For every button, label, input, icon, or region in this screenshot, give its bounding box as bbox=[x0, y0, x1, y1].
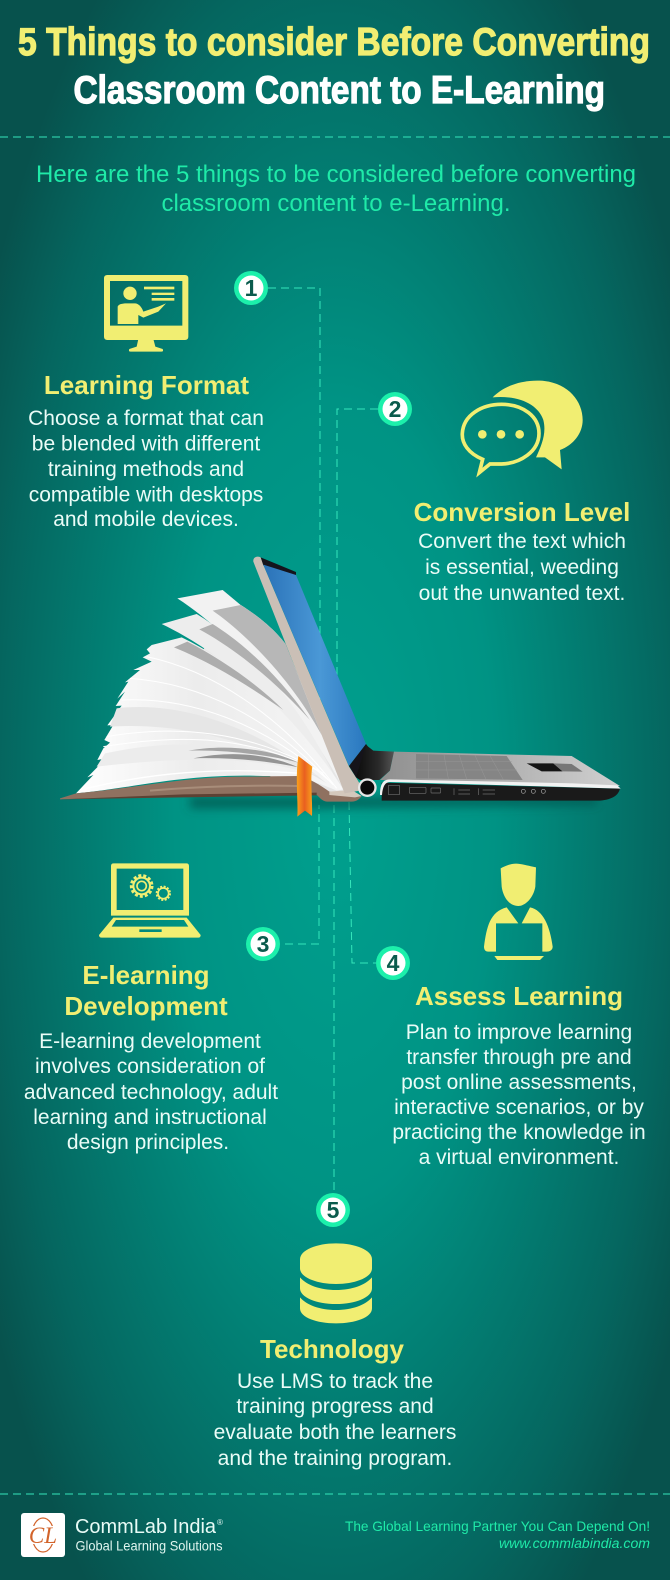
title bbox=[18, 21, 650, 112]
description: learning and instructional bbox=[33, 1106, 267, 1129]
description: design principles. bbox=[67, 1131, 229, 1154]
description bbox=[392, 1021, 646, 1169]
description: and the training program. bbox=[218, 1447, 452, 1470]
icon: database bbox=[300, 1243, 372, 1323]
badge 1 bbox=[234, 271, 268, 305]
description bbox=[28, 407, 264, 531]
description: be blended with different bbox=[32, 432, 260, 456]
heading: Learning Format bbox=[44, 370, 249, 400]
title: Classroom Content to E-Learning bbox=[74, 69, 605, 112]
connector lines bbox=[246, 288, 378, 1193]
book cover bbox=[60, 776, 362, 802]
description bbox=[418, 530, 626, 605]
description: evaluate both the learners bbox=[214, 1421, 456, 1444]
company name bbox=[75, 1516, 223, 1554]
description: Convert the text which bbox=[418, 530, 626, 553]
description: practicing the knowledge in bbox=[392, 1121, 646, 1144]
icon: laptop with gears bbox=[99, 863, 201, 938]
description: transfer through pre and bbox=[406, 1046, 632, 1069]
ports bbox=[389, 785, 545, 795]
section 4: assess learning bbox=[376, 864, 646, 1169]
intro text bbox=[36, 161, 636, 217]
description: training methods and bbox=[48, 458, 244, 481]
heading: Development bbox=[64, 991, 228, 1021]
description: Use LMS to track the bbox=[237, 1370, 433, 1393]
logo: CL bbox=[29, 1523, 57, 1548]
description: training progress and bbox=[236, 1395, 434, 1418]
icon: presenter monitor bbox=[104, 275, 188, 352]
flying pages bbox=[162, 590, 347, 792]
badge 3 bbox=[246, 927, 280, 961]
badge 2 bbox=[378, 392, 412, 426]
heading: E-learning bbox=[82, 960, 210, 990]
section 5: technology bbox=[214, 1193, 456, 1470]
badge 1: 1 bbox=[245, 275, 258, 301]
description: advanced technology, adult bbox=[24, 1081, 278, 1104]
badge 4 bbox=[376, 946, 410, 980]
intro text: classroom content to e-Learning. bbox=[162, 190, 510, 217]
icon: speech bubbles bbox=[462, 381, 583, 473]
badge 3: 3 bbox=[257, 931, 269, 957]
section 1: learning format bbox=[28, 271, 268, 531]
heading: Assess Learning bbox=[415, 981, 623, 1011]
description: Plan to improve learning bbox=[406, 1021, 632, 1044]
description: out the unwanted text. bbox=[419, 582, 625, 605]
page stack bbox=[76, 637, 343, 793]
description: interactive scenarios, or by bbox=[394, 1096, 644, 1119]
company name: CommLab India bbox=[75, 1516, 217, 1538]
badge 5 bbox=[316, 1193, 350, 1227]
shadow bbox=[190, 797, 597, 808]
description: post online assessments, bbox=[401, 1071, 637, 1094]
section 2: conversion level bbox=[378, 381, 630, 605]
description: involves consideration of bbox=[35, 1055, 265, 1078]
badge 5: 5 bbox=[327, 1197, 340, 1223]
description: E-learning development bbox=[39, 1030, 261, 1053]
description: Choose a format that can bbox=[28, 407, 264, 430]
laptop base bbox=[356, 745, 621, 801]
book and laptop illustration bbox=[60, 557, 621, 817]
description bbox=[214, 1370, 456, 1470]
tagline and url: www.commlabindia.com bbox=[499, 1536, 650, 1551]
lid back bbox=[253, 557, 363, 793]
laptop screen bbox=[261, 557, 372, 777]
logo bbox=[21, 1513, 65, 1557]
company name: Global Learning Solutions bbox=[76, 1538, 222, 1554]
tagline and url bbox=[345, 1518, 650, 1551]
heading: Technology bbox=[260, 1334, 405, 1364]
description: a virtual environment. bbox=[419, 1146, 619, 1169]
bookmark ribbon bbox=[297, 756, 312, 817]
description bbox=[24, 1030, 278, 1154]
footer bbox=[21, 1513, 650, 1557]
heading: Conversion Level bbox=[414, 497, 630, 527]
description: compatible with desktops bbox=[29, 484, 263, 506]
section 3: e-learning development bbox=[24, 863, 280, 1154]
heading bbox=[64, 960, 228, 1021]
badge 2: 2 bbox=[389, 396, 401, 422]
description: and mobile devices. bbox=[53, 508, 239, 531]
description: is essential, weeding bbox=[425, 556, 619, 579]
tagline and url: The Global Learning Partner You Can Depend On! bbox=[345, 1518, 650, 1534]
badge 4: 4 bbox=[387, 950, 400, 976]
intro text: Here are the 5 things to be considered before converting bbox=[36, 161, 636, 188]
icon: person with laptop bbox=[484, 864, 553, 960]
company name: ® bbox=[217, 1518, 223, 1527]
